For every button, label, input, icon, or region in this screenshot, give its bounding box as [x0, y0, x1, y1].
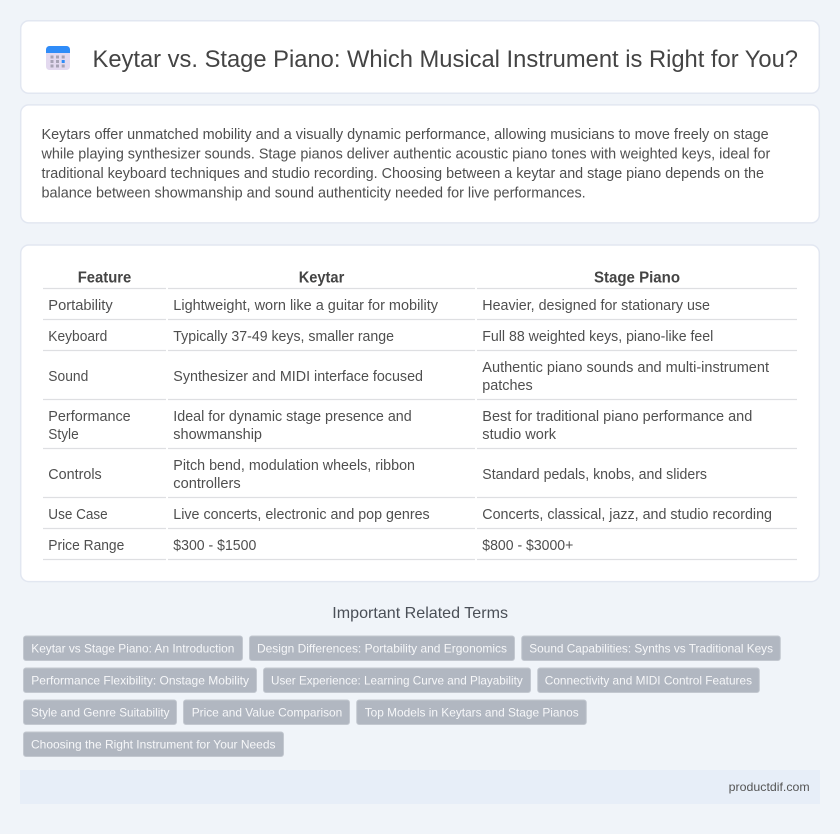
row: portability: Portability [48, 298, 114, 314]
row: use case: Use Case [48, 507, 108, 523]
panel: introduction text: Keytars offer unmatched mobility and a visually dynamic performance, allowing musicians to move freely on stage [42, 127, 769, 143]
chip: Top Models in Keytars and Stage Pianos [365, 705, 579, 719]
row: keyboard: Typically 37-49 keys, smaller range [173, 329, 394, 345]
row: controls: Pitch bend, modulation wheels, ribbon [173, 458, 415, 474]
row: controls: controllers [173, 476, 241, 492]
chip: Style and Genre Suitability [31, 705, 170, 719]
table header row: Keytar [299, 270, 344, 287]
row: controls [48, 458, 707, 492]
row: keyboard: Keyboard [48, 329, 107, 345]
chip: User Experience: Learning Curve and Playability [271, 673, 523, 687]
row: sound [48, 360, 769, 394]
chip [24, 668, 256, 692]
panel: introduction text: while playing synthesizer sounds. Stage pianos deliver authentic acoustic piano tones with weighted keys, ideal for [41, 146, 770, 162]
chip [24, 636, 242, 660]
panel: comparison table [21, 245, 819, 582]
row: controls: Standard pedals, knobs, and sliders [482, 467, 707, 483]
row: keyboard [48, 329, 713, 345]
table header row: Feature [78, 270, 132, 287]
chip [357, 700, 586, 724]
row: portability: Heavier, designed for stationary use [482, 298, 710, 314]
chip [538, 668, 759, 692]
row: performance style: Ideal for dynamic stage presence and [173, 409, 412, 425]
row: sound: Authentic piano sounds and multi-instrument [482, 360, 769, 376]
row: sound: patches [482, 378, 533, 394]
icon: calendar [46, 46, 70, 70]
row: keyboard: Full 88 weighted keys, piano-like feel [482, 329, 713, 345]
row: performance style: Best for traditional piano performance and [482, 409, 752, 425]
chip: Design Differences: Portability and Ergonomics [257, 641, 507, 655]
row: performance style: Performance [48, 409, 131, 425]
chip: Choosing the Right Instrument for Your Needs [31, 737, 276, 751]
row: use case: Live concerts, electronic and pop genres [173, 507, 430, 523]
row: price range [48, 538, 573, 554]
row: price range: Price Range [48, 538, 124, 554]
chip: Sound Capabilities: Synths vs Traditional Keys [529, 641, 773, 655]
chip: Performance Flexibility: Onstage Mobility [31, 673, 249, 687]
chip: Price and Value Comparison [192, 705, 342, 719]
row: performance style: showmanship [173, 427, 262, 443]
chip [522, 636, 780, 660]
row: price range: $800 - $3000+ [482, 538, 573, 554]
chip: Connectivity and MIDI Control Features [545, 673, 752, 687]
row: use case: Concerts, classical, jazz, and studio recording [482, 507, 772, 523]
heading: important related terms: Important Related Terms [332, 605, 508, 622]
row: controls: Controls [48, 467, 102, 483]
panel: introduction text: traditional keyboard techniques and studio recording. Choosing between a keytar and stage piano depends on the [42, 166, 764, 182]
panel: header [21, 21, 819, 93]
chip [184, 700, 350, 724]
row: use case [48, 507, 772, 523]
table header row: Stage Piano [594, 270, 680, 287]
chip [24, 732, 284, 756]
footer [20, 770, 820, 804]
chip [24, 700, 176, 724]
title: Keytar vs. Stage Piano: Which Musical Instrument is Right for You? [92, 46, 798, 73]
panel: related term chips [24, 636, 780, 756]
row: portability: Lightweight, worn like a guitar for mobility [173, 298, 439, 314]
row: performance style: studio work [482, 427, 557, 443]
row: portability [48, 298, 710, 314]
chip: Keytar vs Stage Piano: An Introduction [31, 641, 234, 655]
footer: productdif.com [729, 780, 810, 794]
row: price range: $300 - $1500 [173, 538, 256, 554]
panel: introduction text [21, 105, 819, 223]
chip [264, 668, 530, 692]
row: sound: Synthesizer and MIDI interface focused [173, 369, 423, 385]
table header row [78, 270, 680, 287]
row: sound: Sound [48, 369, 88, 385]
row: performance style [48, 409, 752, 443]
panel: introduction text: balance between showmanship and sound authenticity needed for live performances. [42, 186, 586, 202]
chip [250, 636, 514, 660]
row: performance style: Style [48, 427, 79, 443]
